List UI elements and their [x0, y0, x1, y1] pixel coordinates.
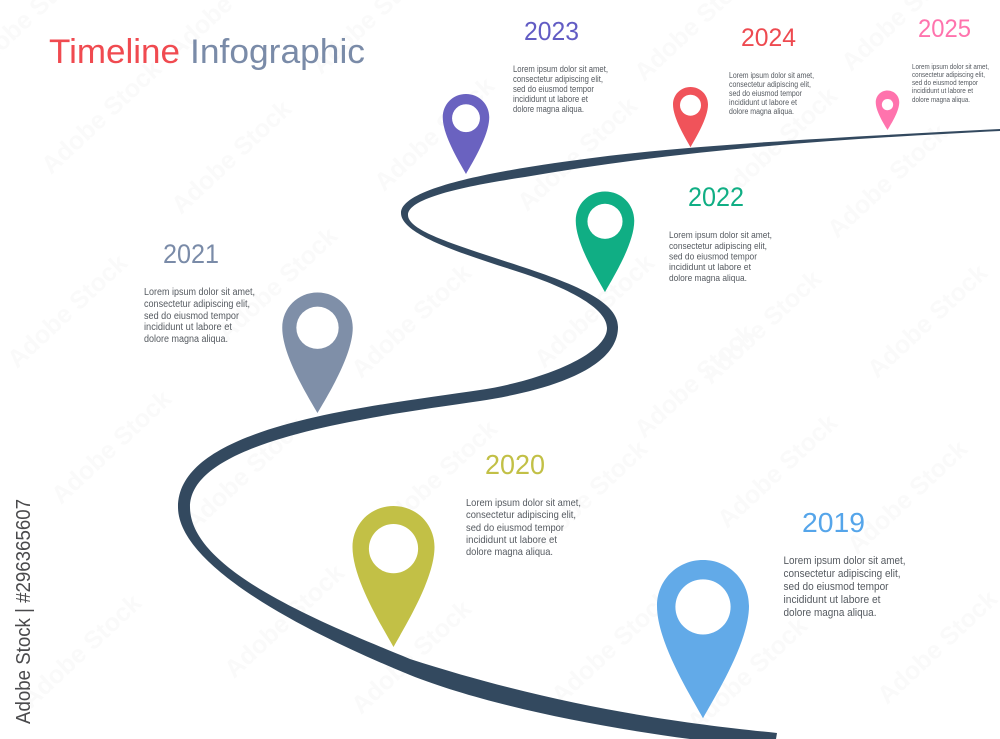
text block 2020: Lorem ipsum dolor sit amet, [466, 497, 581, 509]
text block 2021: dolore magna aliqua. [144, 334, 228, 345]
text: Adobe Stock [346, 259, 477, 383]
panel: 2022 [576, 182, 772, 292]
text: Adobe Stock [842, 435, 973, 559]
icon: 2019 map pin [657, 560, 749, 718]
text: Adobe Stock [712, 82, 843, 206]
text: Adobe Stock [629, 319, 760, 443]
text block 2022: dolore magna aliqua. [669, 273, 747, 284]
text: Adobe Stock [862, 259, 993, 383]
text: Adobe Stock [16, 589, 147, 713]
text block 2021 [144, 287, 255, 345]
stock id side label: Adobe Stock | #296365607 [13, 499, 35, 724]
text block 2023: consectetur adipiscing elit, [513, 74, 603, 84]
text: Adobe Stock [166, 95, 297, 219]
text block 2022: incididunt ut labore et [669, 262, 751, 273]
text block 2023: dolore magna aliqua. [513, 104, 584, 114]
text block 2023: sed do eiusmod tempor [513, 84, 594, 94]
text block 2025 [912, 62, 989, 104]
text block 2022: consectetur adipiscing elit, [669, 241, 767, 252]
text: Adobe Stock [512, 92, 643, 216]
text block 2024: incididunt ut labore et [729, 98, 798, 107]
year 2025: 2025 [918, 15, 971, 43]
text block 2019: Lorem ipsum dolor sit amet, [784, 555, 906, 567]
text block 2025: dolore magna aliqua. [912, 95, 970, 104]
text: Adobe Stock [822, 119, 953, 243]
text: Adobe Stock [46, 385, 177, 509]
text block 2024: Lorem ipsum dolor sit amet, [729, 71, 814, 80]
icon: 2022 map pin [576, 192, 634, 292]
text: Adobe Stock [682, 612, 813, 736]
text block 2020: dolore magna aliqua. [466, 546, 553, 558]
title: Timeline [49, 33, 180, 71]
panel: 2023 [443, 16, 608, 174]
year 2024: 2024 [741, 24, 796, 52]
text block 2025: consectetur adipiscing elit, [912, 70, 985, 79]
text: Adobe Stock [872, 585, 1000, 709]
text block 2023: incididunt ut labore et [513, 94, 588, 104]
text block 2022: Lorem ipsum dolor sit amet, [669, 230, 772, 241]
text block 2024: sed do eiusmod tempor [729, 89, 802, 98]
text block 2025: Lorem ipsum dolor sit amet, [912, 62, 989, 71]
icon: 2021 map pin [282, 292, 353, 413]
text: Adobe Stock [529, 249, 660, 373]
year 2020: 2020 [485, 449, 545, 480]
text block 2022: sed do eiusmod tempor [669, 252, 757, 262]
year 2019: 2019 [802, 507, 865, 538]
text: Adobe Stock [179, 412, 310, 536]
text block 2023: Lorem ipsum dolor sit amet, [513, 64, 608, 74]
panel: 2020 [352, 449, 581, 647]
text: Adobe Stock [522, 435, 653, 559]
text: Adobe Stock [696, 265, 827, 389]
text block 2025: incididunt ut labore et [912, 86, 973, 95]
text: Adobe Stock [346, 595, 477, 719]
year 2021: 2021 [163, 239, 219, 269]
text block 2024 [729, 71, 814, 116]
panel: 2024 [673, 24, 814, 147]
text block 2025: sed do eiusmod tempor [912, 78, 979, 87]
text block 2022 [669, 230, 772, 284]
icon: 2025 map pin [876, 90, 899, 130]
text block 2019: dolore magna aliqua. [784, 607, 876, 619]
text block 2021: consectetur adipiscing elit, [144, 299, 250, 310]
text: Adobe Stock [212, 222, 343, 346]
text: Adobe Stock [2, 249, 133, 373]
winding road [178, 129, 1000, 739]
icon: 2023 map pin [443, 94, 489, 174]
year 2022: 2022 [688, 182, 744, 212]
text: Adobe Stock [369, 72, 500, 196]
text block 2019: incididunt ut labore et [784, 594, 880, 606]
text: Adobe Stock [712, 409, 843, 533]
panel: 2021 [144, 239, 353, 413]
text block 2020: consectetur adipiscing elit, [466, 509, 576, 521]
text: Adobe Stock [219, 559, 350, 683]
text block 2021: Lorem ipsum dolor sit amet, [144, 287, 255, 298]
text block 2020: sed do eiusmod tempor [466, 522, 564, 534]
year 2023: 2023 [524, 16, 579, 46]
panel: 2025 [876, 15, 989, 130]
text block 2019: sed do eiusmod tempor [784, 581, 889, 593]
title: Infographic [190, 33, 365, 71]
icon: 2020 map pin [352, 506, 434, 647]
text block 2020: incididunt ut labore et [466, 534, 557, 546]
text block 2019 [784, 555, 906, 619]
text block 2024: consectetur adipiscing elit, [729, 80, 811, 89]
icon: 2024 map pin [673, 87, 708, 147]
panel: 2019 [657, 507, 906, 718]
text: Adobe Stock [372, 415, 503, 539]
text block 2020 [466, 497, 581, 558]
text block 2024: dolore magna aliqua. [729, 107, 794, 116]
text block 2021: incididunt ut labore et [144, 322, 232, 333]
text: Adobe Stock [36, 55, 167, 179]
text block 2021: sed do eiusmod tempor [144, 311, 240, 322]
text: Adobe Stock [546, 585, 677, 709]
text block 2019: consectetur adipiscing elit, [784, 568, 900, 580]
text block 2023 [513, 64, 608, 114]
